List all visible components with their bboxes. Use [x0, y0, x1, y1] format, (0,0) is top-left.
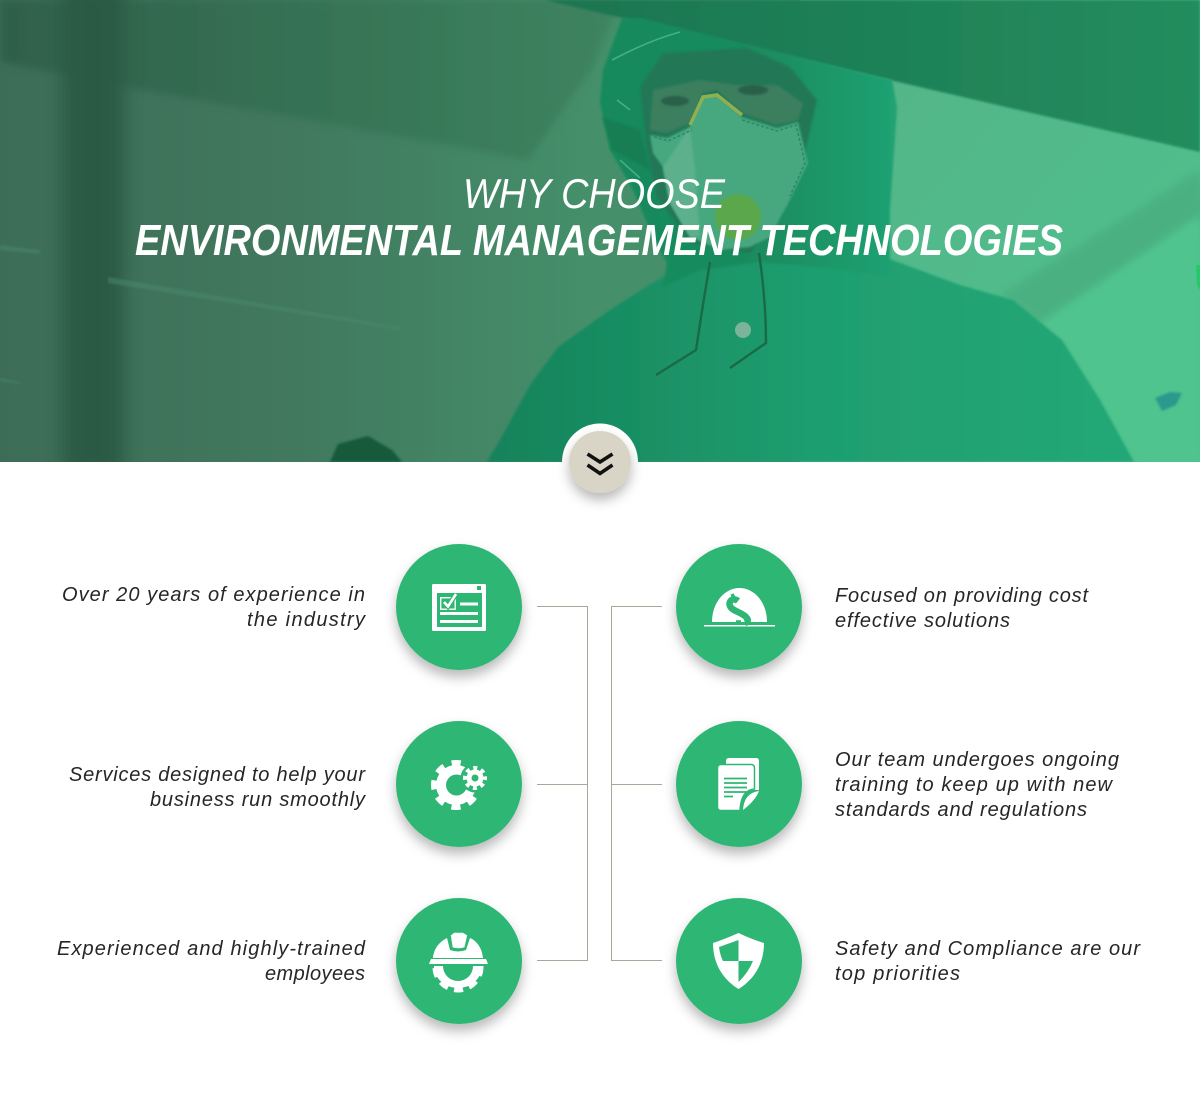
item: training: standards and regulations [835, 799, 1087, 821]
title: ENVIRONMENTAL MANAGEMENT TECHNOLOGIES [135, 216, 1063, 265]
item: services [69, 721, 522, 847]
item: training: training to keep up with new [835, 774, 1114, 796]
item: services: business run smoothly [150, 789, 366, 811]
cords and button [656, 253, 766, 375]
item: employees: Experienced and highly-trained [57, 938, 366, 960]
item: cost effective: effective solutions [835, 610, 1010, 632]
icon: dollar dome [704, 588, 775, 626]
connector lines [537, 606, 662, 960]
hood [600, 18, 897, 287]
face opening [640, 48, 817, 253]
mask [650, 95, 808, 250]
scroll-down badge [562, 424, 638, 493]
item: safety: top priorities [835, 963, 960, 985]
item: training [676, 721, 1119, 847]
jacket [487, 250, 1134, 462]
item: services: Services designed to help your [69, 764, 366, 786]
title: WHY CHOOSE [463, 170, 726, 217]
title [135, 170, 1063, 265]
icon: hard hat and gear [429, 932, 488, 990]
item: employees [57, 898, 522, 1024]
item: employees: employees [265, 963, 365, 985]
item: cost effective [676, 544, 1089, 670]
item: cost effective: Focused on providing cost [835, 585, 1089, 607]
icon: shield [713, 933, 764, 989]
item: experience: the industry [247, 609, 366, 631]
item: safety [676, 898, 1141, 1024]
item: training: Our team undergoes ongoing [835, 749, 1119, 771]
item: experience: Over 20 years of experience in [62, 584, 365, 606]
icon: certificate checklist [432, 584, 486, 631]
icon: documents [718, 758, 759, 810]
item: experience [62, 544, 522, 670]
icon: gears [434, 763, 490, 807]
item: safety: Safety and Compliance are our [835, 938, 1141, 960]
hero photo background [0, 0, 1200, 480]
